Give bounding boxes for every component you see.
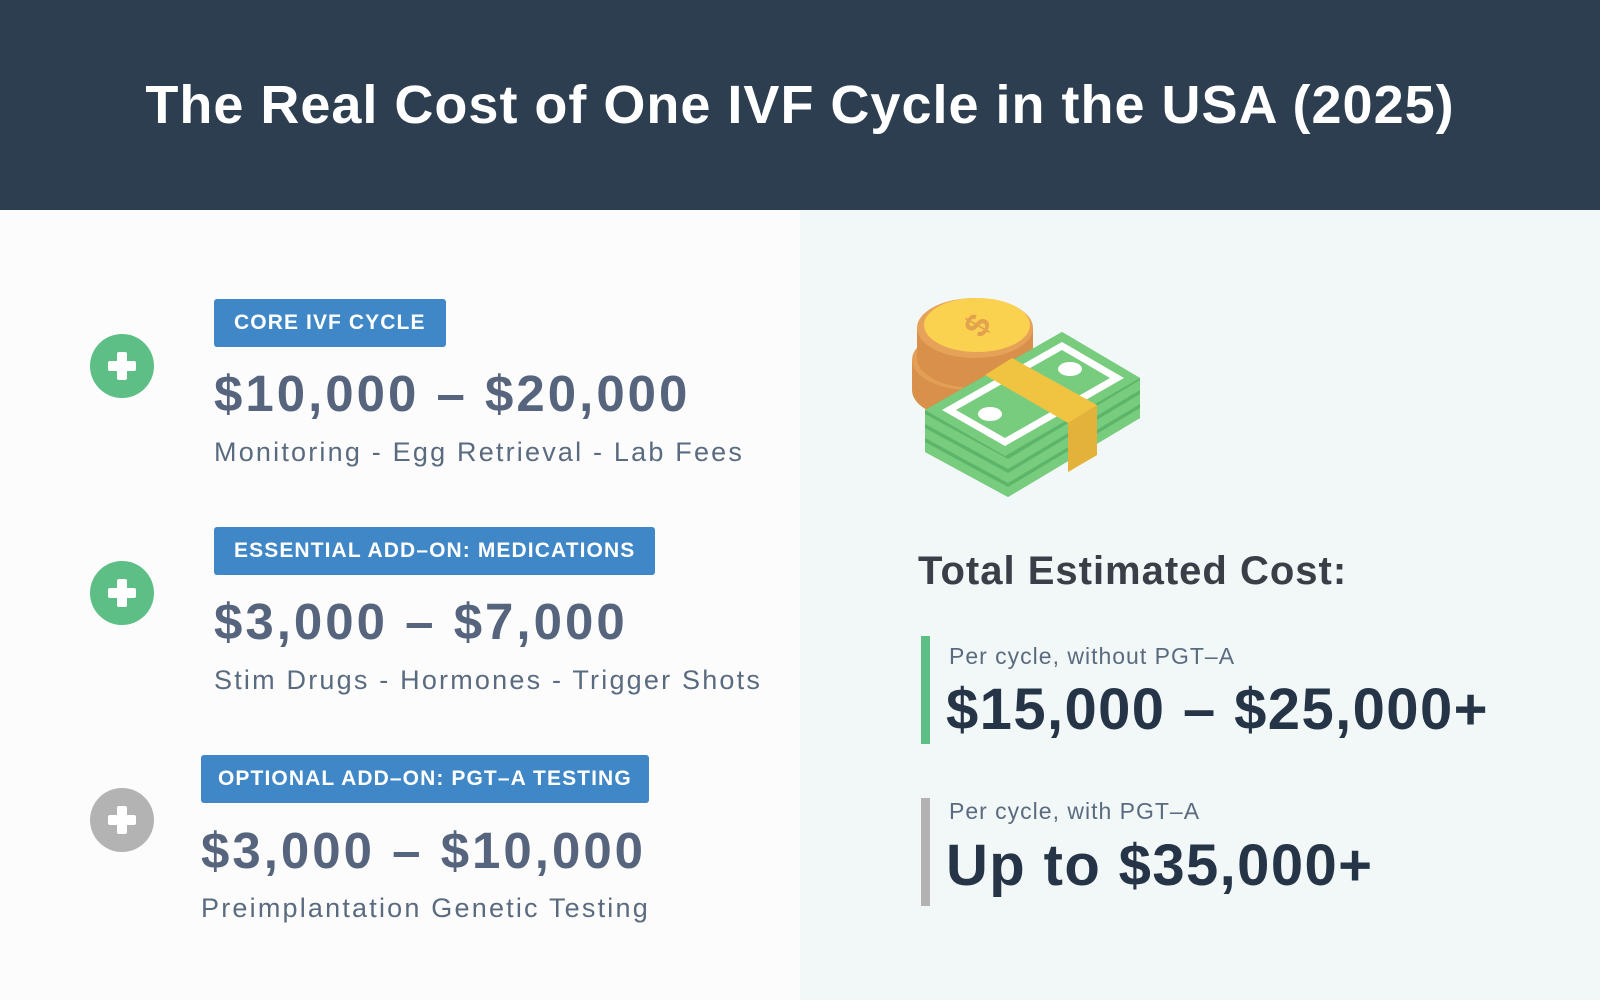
accent bar green <box>921 636 930 744</box>
tag: ESSENTIAL ADD–ON: MEDICATIONS <box>234 539 635 562</box>
icon: plus green <box>90 561 154 625</box>
label: Per cycle, with PGT–A <box>949 798 1200 824</box>
description: Stim Drugs - Hormones - Trigger Shots <box>214 665 762 695</box>
heading: total estimated cost: Total Estimated Cost: <box>918 549 1347 593</box>
total: without PGT-A <box>921 636 1489 744</box>
label: Per cycle, without PGT–A <box>949 643 1235 669</box>
total: with PGT-A <box>921 798 1373 906</box>
description: Preimplantation Genetic Testing <box>201 893 650 923</box>
accent bar gray <box>921 798 930 906</box>
item: medications <box>90 527 762 695</box>
header <box>0 0 1600 210</box>
tag: OPTIONAL ADD–ON: PGT–A TESTING <box>218 767 632 790</box>
icon: plus gray <box>90 788 154 852</box>
tag: CORE IVF CYCLE <box>234 311 426 334</box>
icon: money stack: $ <box>957 308 999 343</box>
price: $10,000 – $20,000 <box>214 365 690 422</box>
item: core IVF <box>90 299 744 467</box>
item: PGT-A <box>90 755 650 923</box>
right panel background <box>800 210 1600 1000</box>
amount: Up to $35,000+ <box>946 833 1373 898</box>
amount: $15,000 – $25,000+ <box>946 677 1489 742</box>
price: $3,000 – $10,000 <box>201 822 646 879</box>
tag <box>214 299 446 347</box>
price: $3,000 – $7,000 <box>214 593 628 650</box>
title: The Real Cost of One IVF Cycle in the USA (2025) <box>145 75 1455 135</box>
tag <box>214 527 655 575</box>
icon: plus green <box>90 334 154 398</box>
icon: money stack <box>912 298 1140 497</box>
tag <box>201 755 649 803</box>
description: Monitoring - Egg Retrieval - Lab Fees <box>214 437 744 467</box>
